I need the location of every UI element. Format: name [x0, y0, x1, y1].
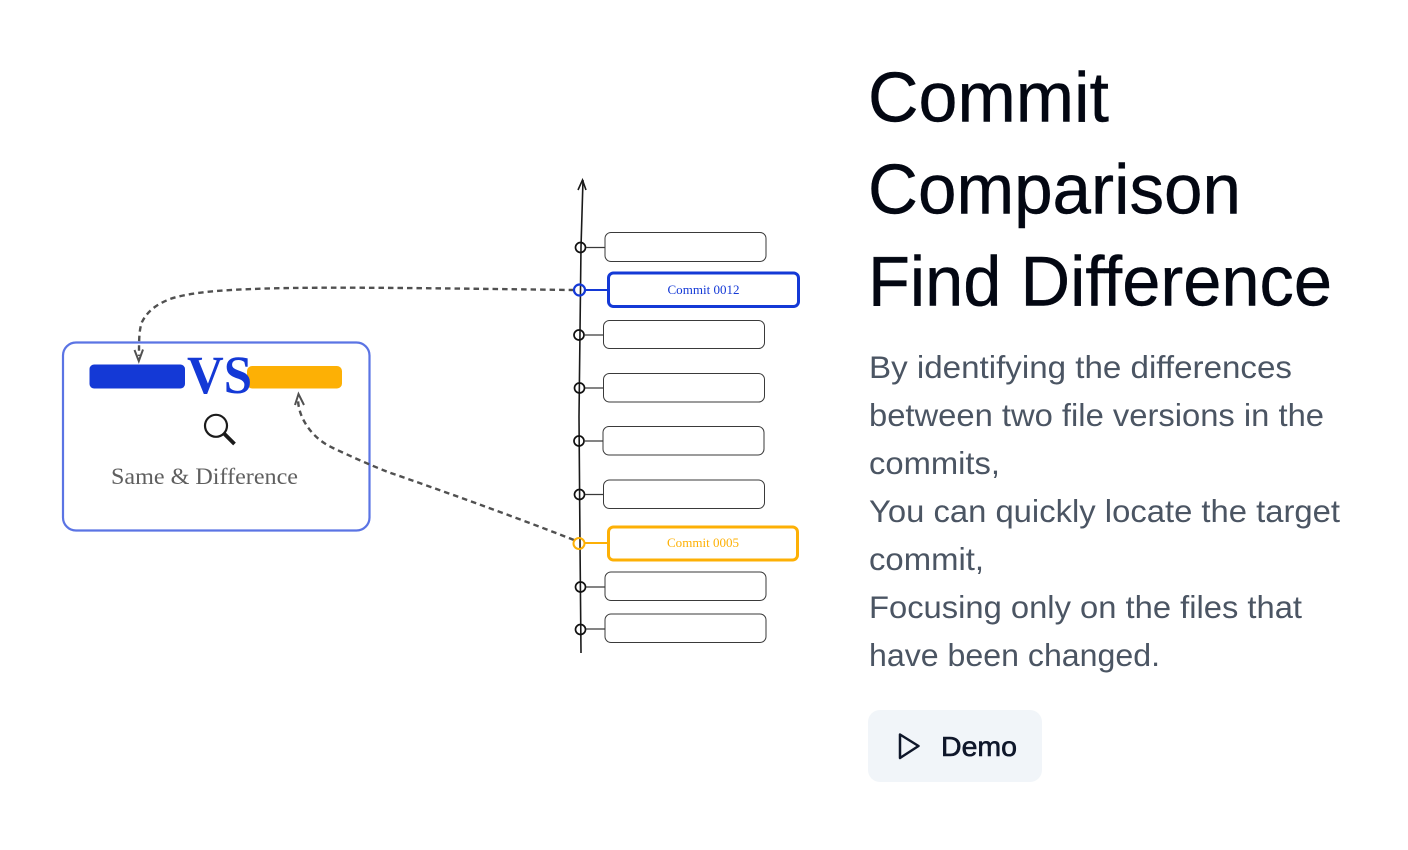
description text: between two file versions in the [869, 397, 1324, 433]
icon: play [900, 734, 918, 758]
panel: comparison card [63, 342, 370, 530]
timeline axis arrow [578, 180, 586, 653]
card caption: Same & Difference [111, 464, 298, 490]
description text: You can quickly locate the target [869, 493, 1340, 529]
title: Comparison [868, 150, 1241, 228]
VS label: VS [187, 345, 252, 405]
commit row [576, 232, 766, 262]
title: Find Difference [868, 242, 1332, 320]
commit row [576, 572, 766, 600]
description text: Focusing only on the files that [869, 589, 1302, 625]
button: Demo: Demo [941, 731, 1017, 762]
commit row [576, 614, 766, 642]
commit row: Commit 0012: Commit 0012 [668, 282, 740, 297]
description text: commits, [869, 445, 1000, 481]
arrow: commit 0012 to blue bar [134, 288, 574, 361]
commit timeline [574, 180, 798, 653]
commit row [574, 480, 764, 508]
arrow: commit 0005 to orange bar [295, 394, 574, 540]
description text [869, 349, 1340, 673]
commit row: Commit 0012 [574, 273, 798, 306]
title: Commit [868, 58, 1109, 136]
orange version bar [247, 366, 342, 388]
title [868, 58, 1332, 320]
commit row [574, 320, 764, 348]
button: Demo [868, 710, 1042, 782]
description text: have been changed. [869, 637, 1160, 673]
commit row: Commit 0005: Commit 0005 [667, 535, 739, 550]
icon: magnifying glass [205, 415, 234, 444]
commit row: Commit 0005 [574, 527, 798, 560]
description text: By identifying the differences [869, 349, 1292, 385]
commit row [574, 426, 764, 455]
description text: commit, [869, 541, 984, 577]
blue version bar [90, 364, 185, 388]
commit row [574, 374, 764, 402]
